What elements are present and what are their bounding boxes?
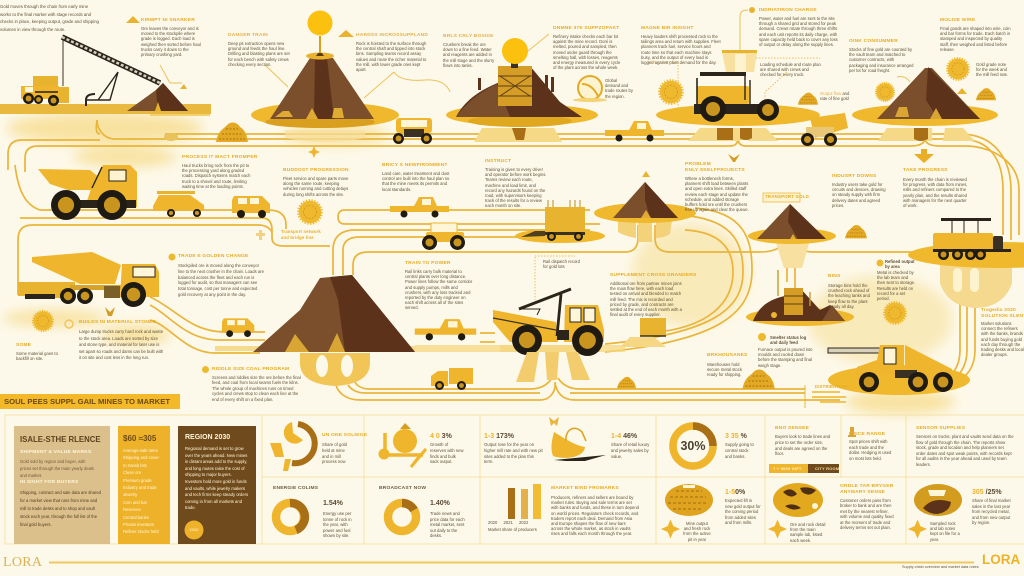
text: block 16: TAKE PROGRESS xyxy=(903,168,948,173)
text: block 28 xyxy=(16,343,58,361)
icon: marker star xyxy=(308,146,320,158)
gold gear: row two xyxy=(298,200,322,224)
text: block 2: DANGER TRAIN xyxy=(228,33,268,38)
card text: price list: Reserves xyxy=(123,507,141,512)
dashboard panel frame xyxy=(5,415,1024,544)
text: block 28: SOME xyxy=(16,343,31,348)
text: block 6: Heavy loaders shift processed rock to the tailings area and return with supplies. Fleet planners track fuel, service hours and route time so that each machine stays busy, and the output of every load is logged against plant demand for the day. xyxy=(641,34,721,65)
donut chart one xyxy=(276,503,305,531)
cell text: oval two: Customer orders pass from broker to bank and are then met by the nearest refiner, with volume and quality fixed at the moment of trade and delivery terms set out plain. xyxy=(840,498,894,530)
badge on region card xyxy=(184,520,204,540)
button label: CITY ROOM xyxy=(815,466,839,471)
text: block 28: Some material goes to backfill on site. xyxy=(16,351,58,361)
text: block 14: PROBLEM xyxy=(685,162,711,167)
callout arrows xyxy=(160,10,910,300)
card text: sale stats: ISALE-STHE RLENCE xyxy=(20,435,101,444)
cell text 4: 1-4 46% xyxy=(611,433,637,440)
title band xyxy=(0,394,180,409)
cell text 7: PRICE RANGE xyxy=(849,432,885,437)
pedestal: big mound xyxy=(215,346,415,386)
caption: oval two: Ore and rock detail from the main sample lab, listed each week. xyxy=(790,522,825,543)
icon: globe nugget xyxy=(573,76,607,102)
icon: butterfly xyxy=(549,417,559,426)
icon: gold bag xyxy=(551,428,606,461)
card text: sale stats: SHIPMENT & VALUE MARKS xyxy=(20,450,91,455)
vehicle: small truck lower xyxy=(431,368,473,390)
text: block 5: Refinery intake checks each bar lot against the mine record. Doré is melted, poured and sampled, then moved under guard through the smelting hall, with losses, reagents and energy measured in every cycle of the plant across the whole week. xyxy=(553,34,620,70)
label tag xyxy=(763,193,800,202)
cell text 4 xyxy=(611,433,650,459)
cell text: oval three xyxy=(972,489,1016,535)
card text: price list: Premium grade xyxy=(123,478,152,483)
text: block 8: Stocks of fine gold are counted by the vault team and matched to customer contracts, with packaging and insurance arranged per lot for road freight. xyxy=(849,47,914,73)
donut: thirty percent xyxy=(673,426,713,466)
card text: price list xyxy=(123,434,159,534)
gold gear: lower left xyxy=(33,311,53,331)
dot marker xyxy=(202,366,209,373)
card text: price list: Shipping and cover xyxy=(123,455,159,460)
cell text: oval two: ANYMARY SENSE xyxy=(840,490,885,495)
text: block 25: Furnace output is poured into moulds and cooled down before the stamping and final weigh stage. xyxy=(758,347,812,368)
text: block 11: BUDDOST PROGRESSION xyxy=(283,168,349,173)
bus xyxy=(933,218,1011,260)
text: block 14: ENLY SKELFPROJECTS xyxy=(685,168,745,173)
text: block 17: Stockpiled ore is moved along the conveyor line to the next crusher in the chain. Loads are balanced across the fleet and each run is logged for audit, so that managers can see total tonnage, cost per tonne and expected gold recovery at any point in the day. xyxy=(178,263,264,297)
gold gear: above mound xyxy=(947,58,969,80)
mound: middle right xyxy=(748,204,836,244)
figure icon xyxy=(256,230,265,240)
text: block 4: BRLS CRLY BOSIDE xyxy=(443,34,494,39)
card text: sale stats: IN SIGHT FOR BUYERS xyxy=(20,480,78,485)
buttons xyxy=(769,464,839,473)
nugget pile xyxy=(216,123,248,142)
button labels: 7 + 5000 GIFT xyxy=(773,466,802,471)
cell text: oval three: 305 /25% xyxy=(972,489,1002,496)
cell text: market: Producers, refiners and sellers are bound by market rules. Buying and sale terms are set with banks and funds, and these in turn depend on world prices. Regulators check records, and traders report each deal. Demand from Asia and Europe shapes the flow of new bars across the whole market, as stock in vaults rises and falls each month through the year. xyxy=(551,495,639,536)
text: block 6: MAGNE BIR INSIGHT xyxy=(641,26,694,31)
arrows at line end xyxy=(812,391,846,403)
text: block 4: Crushers break the ore down to a fine feed. Water and reagents are added in the mill stage and the slurry flows into tanks. xyxy=(443,42,494,68)
nugget pile lower xyxy=(742,370,774,389)
vehicle: van xyxy=(222,318,254,337)
card text: price list: Industry and trade xyxy=(123,485,157,490)
text: block 11: Fleet service and spare parts move along the same route, keeping vehicles running and cutting delays during long shifts across the site. xyxy=(283,176,348,197)
text: gear caption xyxy=(281,229,321,240)
card text: price list: $60 ≈305 xyxy=(123,434,156,443)
ring marker xyxy=(65,320,73,328)
ground platform: top left xyxy=(0,104,211,116)
cell text: donut one: Energy use per tonne of rock in the year, with power and fuel shown by site. xyxy=(323,511,352,538)
card text: sale stats: Shipping, contract and sale data are shared for a market view that runs from mine and mill to trade desks and to shop and vault stock each year, through the full list of the final gold buyers. xyxy=(20,490,101,527)
background washes xyxy=(3,112,955,414)
small loader truck: top row xyxy=(393,118,432,144)
text: block 16: Every month the chain is reviewed for progress, with data from mines, mills and refiners compared to the yearly plan, and the results shared with managers for the next quarter of work. xyxy=(903,177,967,208)
cell text: oval three: Share of final market sales in the last year from recycled metal, and from new output by region. xyxy=(972,498,1011,525)
card text: region: Regional demand is set to grow over the years ahead. New mines in distant areas add to the supply, and long routes raise the cost of shipping to major buyers. Investors hold more gold in funds and vaults, while jewelry makers and tech firms keep steady orders coming in from all markets and trade. xyxy=(185,446,248,510)
text: block 24: Smelter status log and daily feed xyxy=(770,335,806,345)
text: block 29: Screens and riddles size the ore before the final feed, and coal from local seams fuels the kilns. The whole group of machines runs on timed cycles and crews stop to clean each line at the end of every shift on a fixed plan. xyxy=(212,375,301,402)
bar chart xyxy=(508,484,541,519)
text: note globe: Global demand and trade routes by the region. xyxy=(605,78,633,99)
text: block 23: Tragedix 2020 xyxy=(981,308,1016,313)
card text: price list: Coin and bar xyxy=(123,500,147,505)
chevron marker xyxy=(105,307,115,316)
text: block 10: Haul trucks bring rock from the pit to the processing yard along graded roads. Dispatch systems match each truck to a shovel and route, limiting waiting time at the loading points. xyxy=(182,163,250,189)
text: block 26: BRKHOUSANES xyxy=(707,353,748,358)
ground band below center truck xyxy=(415,345,625,352)
cell text 7: Spot prices shift with each trade and the dollar. Hedging is used on most lots held. xyxy=(849,439,891,461)
card text: price list: Refiner stocks held xyxy=(123,529,159,534)
vehicle: cargo wagon xyxy=(153,191,204,217)
mound factory: right xyxy=(746,270,854,326)
text: block 8: OINK CONSUMMER xyxy=(849,39,898,44)
text: block 10: PROCESS IT MACT FROMPER xyxy=(182,155,258,160)
text: block 26 xyxy=(707,353,748,377)
intro text: Gold moves through the chain from early mine works to the final market with stage records and checks in place, keeping output, grade and shipping volumes in view through the route. xyxy=(0,4,99,32)
conveyor crane xyxy=(62,37,160,106)
cell text: donut two: 1.40% xyxy=(430,500,450,507)
text: block 27: Large dump trucks carry hard rock and waste to the stock area. Loads are sorted by size and stone type, and material for later use is set apart so roads and dams can be built with it on site and cost less in the long run. xyxy=(79,329,163,360)
caption: oval three: Sampled rock and lab notes kept on file for a year. xyxy=(930,521,960,542)
text: block 10 xyxy=(182,155,258,189)
text: block 17: TRADE E GOLDEN CHANGE xyxy=(178,254,248,259)
photo oval three xyxy=(914,484,962,516)
text: block 12: BRICY S NEWFIRONMENT xyxy=(382,163,448,168)
text: block 20 xyxy=(610,273,697,317)
text: block 22: Metal is checked by the lab team and then sent to storage. Results are held on record for a set period. xyxy=(877,270,915,301)
badge text: 2030 xyxy=(190,527,198,532)
dot marker xyxy=(876,260,884,266)
flow lines: lower route xyxy=(150,280,975,408)
text: block 14: Where a bottleneck forms, planners shift load between plants and open extra lines. Skilled staff review each stage and update the schedule, and added storage buffers hold ore until the crushers free up again and clear the queue. xyxy=(685,176,749,212)
cell text: donut one: 1.54% xyxy=(323,500,343,507)
generator xyxy=(620,318,666,347)
text: block 20: Additional ore from partner mines joins the main flow here, with each load tested on arrival and blended to match mill feed. The mix is recorded and priced by grade, and contracts are settled at the end of each month with a final audit of every supplier. xyxy=(610,281,682,317)
text: gear caption: and bridge line xyxy=(281,235,314,240)
icon: star three xyxy=(908,520,927,538)
cell text 2: 4 0 3% xyxy=(430,433,452,440)
footer logo right: LORA xyxy=(982,552,1020,567)
card text: price list: Jewelry xyxy=(123,492,137,497)
text: block 20: SUPPLEMENT CROSS GRANDERS xyxy=(610,273,697,278)
loader platform xyxy=(656,104,820,141)
text: block 12: Land care, water treatment and dust control are built into the haul plan so that the mine meets its permits and local standards. xyxy=(382,171,449,192)
cell text: oval two: ORDLE TAR BRYGER xyxy=(840,484,893,489)
text: block 15: INDUSRT DOWNS xyxy=(832,174,876,179)
dump truck: top right xyxy=(801,113,848,146)
nugget pile: right xyxy=(845,225,867,238)
platform and factory mound xyxy=(446,38,598,142)
text: block 3: Rock is hoisted to the surface through the central shaft and tipped into stock bins. Sampling teams record assay values and route the richer material to the mill, with lower grade ores kept apart. xyxy=(356,41,426,72)
long dump truck xyxy=(18,252,159,307)
cell text 3: 1-3 173% xyxy=(484,433,514,440)
photo oval one xyxy=(665,484,713,516)
gold gear xyxy=(659,80,683,104)
text: block 1: KIRMPT NI SNARKER xyxy=(141,18,195,23)
ore mound: top left xyxy=(127,83,188,111)
card text: price list: Clean ore xyxy=(123,470,141,475)
platform and dump truck: lower right xyxy=(828,345,970,395)
pedestal: right mound xyxy=(775,240,810,268)
text: block 13: INSTRUCT xyxy=(485,159,511,164)
text: block 22: Refined output by area xyxy=(885,259,915,269)
gold gears xyxy=(876,83,894,101)
card text: region: REGION 2030 xyxy=(185,434,230,441)
text: block 15: Industry users take gold for circuits and devices, drawing on steady supply with firm delivery dates and agreed prices. xyxy=(832,182,886,208)
card text: price list: Central banks xyxy=(123,515,149,520)
text: block 5: DNMNE 37E SUPPZOPAKT xyxy=(553,26,619,31)
icon: star one xyxy=(661,520,680,538)
photo oval two xyxy=(773,483,823,517)
cell text 1 xyxy=(322,433,367,464)
text: block 23: Market solutions connect the refiners with the banks, brands and funds buying gold each day through the trading desks and local dealer groups. xyxy=(981,321,1024,357)
cell text 5 xyxy=(725,433,754,459)
pickup with arrow xyxy=(605,121,664,142)
small cargo icon xyxy=(164,133,178,141)
card text: price list: In transit lots xyxy=(123,463,147,468)
text: block 19: Rail dispatch record for gold lots xyxy=(543,259,580,269)
icon: ring and legs xyxy=(270,422,315,471)
nugget pile: lower xyxy=(744,370,775,389)
flow lines: middle route xyxy=(15,165,935,352)
footer rule xyxy=(49,562,974,564)
bar caption: Market share of producers xyxy=(488,527,537,532)
cell text: market: MARKET BIND FROMARKS xyxy=(551,486,619,491)
icon: gold sack with shovel xyxy=(378,423,426,467)
icon: small lamp xyxy=(848,427,856,437)
gold gear: right xyxy=(884,302,906,324)
large loader truck xyxy=(694,50,779,122)
cell text 1: UN ONE SOLNIGE xyxy=(322,433,367,438)
flow lines: upper route xyxy=(8,120,1019,240)
cell text 2: Growth of reserves with new finds and bulk sack output. xyxy=(430,442,464,464)
card: region xyxy=(178,426,256,544)
cell text 5: Supply going to central stock and banks. xyxy=(725,442,754,459)
cell text: donut two xyxy=(430,500,466,540)
dump truck: row two xyxy=(38,165,137,220)
text: block 21: Storage bins hold the crushed rock ahead of the leaching tanks and keep flow to the plant steady all day. xyxy=(828,283,870,309)
pedestal: middle mound xyxy=(618,220,672,242)
card text: price list: Private investors xyxy=(123,522,154,527)
pedestal: center truck xyxy=(516,352,590,382)
platform and mound 1 xyxy=(251,10,399,142)
text: block 18: TRAIN TO POWER xyxy=(405,261,451,266)
vehicle: pickup center xyxy=(415,319,476,340)
big mound xyxy=(253,275,415,352)
text: note gear: Output flow and rate of fine gold xyxy=(820,91,849,101)
text: block 3: HARDSS INCROSSUPPLAND xyxy=(356,33,428,38)
vehicle: car lower xyxy=(617,377,636,388)
bar labels: 2020 2021 2022 xyxy=(488,520,528,525)
cell text 3: Output rose for the year on higher mill rate and with new pit sites added to the plan this term. xyxy=(484,442,543,464)
cell text: percent xyxy=(725,489,761,535)
text: small note: Loading schedule and route plan are shared with crews and checked for every truck. xyxy=(760,62,821,77)
card text: sale stats: Gold sold by region and buyer, with prices set through the main yearly deals and market. xyxy=(20,459,94,478)
caption: oval one: Mine output and fresh rock from the active pit in year xyxy=(683,521,711,542)
cell text 4: Share of retail luxury and jewelry sales by value. xyxy=(611,442,649,459)
vehicle: pickup xyxy=(390,197,449,218)
title text: SOUL PEES SUPPL GAIL MINES TO MARKET xyxy=(4,397,170,406)
footer note: Supply chain overview and market data notes xyxy=(902,565,979,569)
mound 3 xyxy=(852,67,998,141)
text: block 7: Power, water and fuel are sent to the site through a shared grid and stored for peak demand. Crews rotate through three shifts and each unit reports its daily charge, with spare capacity held back to cover any loss of output or delay along the supply lines. xyxy=(759,16,838,47)
generator platform xyxy=(515,200,605,243)
gold gear: beside loader xyxy=(798,93,818,105)
text: line labels: DISTRIBUTION xyxy=(815,384,847,389)
cell heading: donut one: ENERGIE COLIMS xyxy=(273,486,318,491)
cell text 6: Buyers look to trade lines and price to set the order size, and deals are agreed on the floor. xyxy=(775,434,830,456)
cell text 1: Share of gold held at mine and in mill process now xyxy=(322,442,347,464)
cell heading: donut two: BROADCAST NOW xyxy=(379,486,426,491)
donut chart two xyxy=(388,503,416,531)
text: block 2: Deep pit extraction opens new ground and feeds the haul line. Drilling and blasting plans are set for each bench with safety crews checking every section. xyxy=(228,41,290,67)
small triangle markers xyxy=(126,7,967,177)
text: note gears: Gold grade note for the week and the mill feed rate. xyxy=(976,62,1008,77)
cell text: percent: 1-50% xyxy=(725,489,745,496)
down arrow xyxy=(914,149,934,163)
text: block 9: MOLDIE WIRE xyxy=(940,18,975,23)
cell text 8: Sensors on trucks, plant and vaults send data on the flow of gold through the chain. The reports show stock, grade and location and help planners set order dates and spot weak points, with records kept for all audits in the year ahead and used by team leaders. xyxy=(916,434,1014,467)
dot marker xyxy=(758,333,766,341)
cell text 5: 3 35 % xyxy=(725,433,747,440)
card text: sale stats xyxy=(20,435,101,527)
cell text 6: BNO SENSEE xyxy=(775,426,809,431)
card text: price list: Average sale rates xyxy=(123,448,158,453)
bus platform and pedestal xyxy=(908,242,1024,308)
vehicle: small truck xyxy=(232,196,270,218)
icon: star two xyxy=(768,520,787,538)
footer logo left: LORA xyxy=(3,555,42,570)
mound and platform: middle xyxy=(594,182,696,223)
text: block 7: INDRIATIRON CHARGE xyxy=(759,8,817,13)
card: price list xyxy=(118,426,170,544)
chevron marker xyxy=(728,154,740,162)
card: sale stats xyxy=(14,426,110,544)
cell text 8: SENSOR SUPPLIES xyxy=(916,426,965,431)
cell text: oval two xyxy=(840,484,898,536)
text: block 26: Warehouses hold secure metal stock ready for shipping. xyxy=(707,362,742,377)
dot marker xyxy=(168,254,176,260)
text: gear caption: Transport network xyxy=(281,229,321,234)
text: block 21: BINS xyxy=(828,274,840,279)
text: block 9: Final goods are shaped into wire, coin and bar forms for trade. Each batch is stamped and inspected by quality staff, then weighed and listed before release. xyxy=(940,26,1011,52)
text: block 29: RIDDLE SIZE COAL PROGRAM xyxy=(212,367,289,372)
text: block 27: BUILDS IN MATERIAL STONES xyxy=(79,320,156,325)
donut center value: 30% xyxy=(680,439,706,453)
cell text: donut two: Trade news and price data for each metal market, sent out daily to the desks. xyxy=(430,511,465,538)
cell text: percent: Expected lift in new gold output for the coming period from added sites and from mills. xyxy=(725,498,761,525)
text: tag label: TRANSPORT GOLD xyxy=(765,194,809,199)
text: block 1: Ore leaves the conveyor and is moved to the stockpile where grade is logged. Each load is weighed then sorted before haul trucks carry it down to the primary crushing yard. xyxy=(141,26,201,57)
text: block 13: Training is given to every driver and operator before work begins. Teams review each route, machine and load limit, and record any hazards found on the road, with supervisors keeping track of the results for a review each month on site. xyxy=(485,167,546,208)
center dump truck xyxy=(493,289,604,356)
nugget xyxy=(976,88,996,100)
vehicle: tractor xyxy=(422,223,465,250)
text: block 18: Rail links carry bulk material to central plants over long distance. Power lines follow the same corridor and supply pumps, mills and crushers, with any loss tracked and reported by the duty engineer on each shift across all of the sites served. xyxy=(405,269,472,310)
truck: top left xyxy=(21,76,69,106)
